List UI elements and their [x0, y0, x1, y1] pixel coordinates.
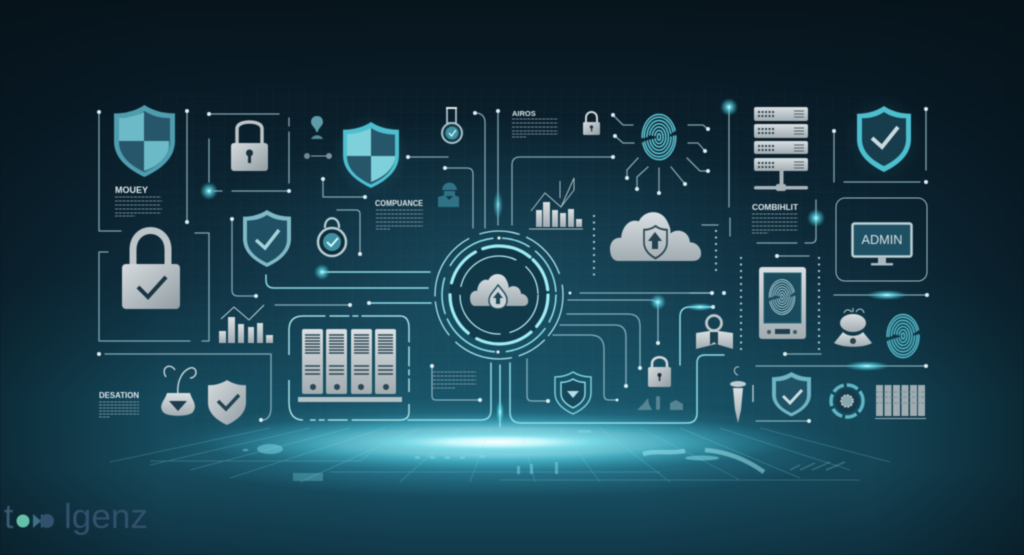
icon: fingerprint, top — [642, 114, 676, 160]
text block: Compuance — [376, 210, 423, 229]
shield: quartered, centre — [333, 113, 409, 197]
server rack frame — [289, 316, 409, 420]
shield: silver check — [208, 380, 246, 425]
heading: Desation: DESATION — [99, 391, 139, 400]
watermark logo: toolgenz — [4, 498, 148, 536]
shield: check, right — [844, 94, 924, 182]
watermark logo: toolgenz: lgenz — [64, 498, 148, 536]
admin label: ADMIN — [862, 233, 902, 247]
icon: small person node — [304, 116, 332, 159]
line chart with bars — [529, 178, 583, 229]
heading: Mouey: MOUEY — [115, 185, 148, 195]
central cloud hub — [435, 231, 563, 359]
heading: Combihlit: COMBIHLIT — [752, 203, 798, 212]
circuit lines right — [408, 98, 929, 427]
circuit lines left — [97, 109, 503, 422]
heading: Airos: AIROS — [512, 109, 536, 118]
padlock: lower centre — [648, 357, 671, 387]
icon: plant pot — [161, 366, 196, 416]
icon: vial check — [442, 108, 462, 143]
padlock: large check — [122, 230, 180, 309]
padlock: keyhole — [231, 122, 268, 171]
icon: fingerprint, right — [887, 314, 919, 358]
shield: check, lower right — [772, 372, 811, 416]
text block: lower centre — [433, 372, 476, 388]
panel: admin monitor — [836, 198, 927, 281]
shield: quartered, top left — [114, 105, 175, 177]
padlock: small — [583, 112, 600, 135]
text block: Airos — [512, 119, 558, 137]
text block: Mouey — [115, 197, 162, 216]
text block: Desation — [99, 402, 139, 417]
shield: check, teal — [243, 210, 291, 267]
icon: gear target — [831, 385, 863, 417]
shield: outline, lower centre — [555, 372, 591, 414]
server rack stack — [754, 107, 808, 191]
watermark logo: toolgenz: t — [4, 498, 14, 536]
heading: Compuance: COMPUANCE — [375, 199, 424, 208]
small muted icons — [637, 396, 683, 410]
icon: robot figure — [834, 308, 872, 347]
icon: carrot probe — [730, 367, 753, 423]
icon: circular padlock — [318, 218, 346, 256]
glowing floor with circuit grid — [110, 398, 890, 498]
cloud with shield upload — [610, 212, 701, 261]
bar chart: left — [219, 305, 273, 343]
icon: person badge — [696, 316, 733, 349]
text block: Combihlit — [752, 214, 798, 233]
tablet with fingerprint — [759, 267, 806, 339]
icon: hooded figure — [438, 182, 459, 207]
server row small — [875, 385, 926, 418]
